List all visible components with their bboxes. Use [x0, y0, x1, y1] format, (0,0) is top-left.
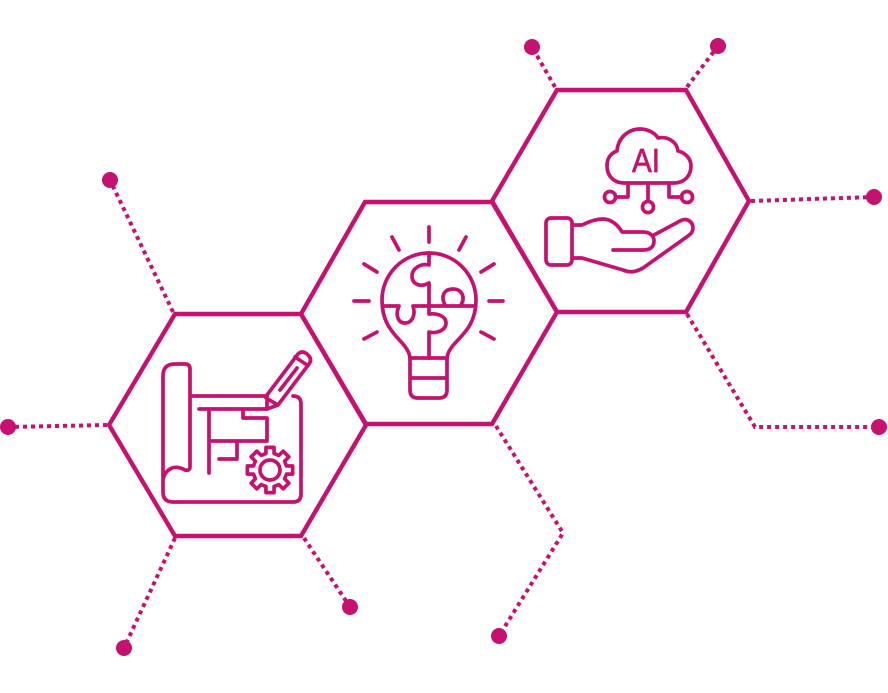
connector: right hexagon to right node: [751, 189, 882, 205]
connector: left hexagon to bottom node: [116, 538, 175, 656]
light rays: [354, 227, 503, 339]
hexagon: centre: [301, 202, 557, 424]
floor plan lines: [199, 409, 267, 473]
connector: left hexagon to top-left node: [102, 172, 173, 312]
connector: left hexagon to bottom-right node: [304, 538, 358, 615]
hand cuff: [546, 218, 572, 265]
connector: right hexagon to top-left node: [524, 39, 555, 87]
hexagon: left: [109, 314, 366, 536]
icon: puzzle light bulb: [354, 227, 503, 398]
cloud: [607, 129, 691, 183]
gear: [247, 447, 293, 493]
icon: AI cloud in hand: [546, 129, 693, 272]
pencil: [266, 352, 310, 409]
puzzle seams: [412, 253, 446, 358]
blueprint sheet: [163, 364, 301, 502]
circuit nodes: [616, 183, 682, 201]
connector: right hexagon to lower-right node: [687, 314, 887, 435]
connector: left hexagon to left node: [0, 419, 107, 435]
hexagon: right: [492, 90, 749, 312]
icon: blueprint with pencil and gear: [163, 352, 310, 502]
hand: [572, 219, 693, 272]
bulb base: [410, 358, 447, 398]
bulb outline: [382, 253, 476, 358]
AI label: AI: [632, 142, 660, 179]
connector: right hexagon to top-right node: [687, 38, 726, 87]
connector: centre hexagon to bottom node: [491, 426, 563, 644]
